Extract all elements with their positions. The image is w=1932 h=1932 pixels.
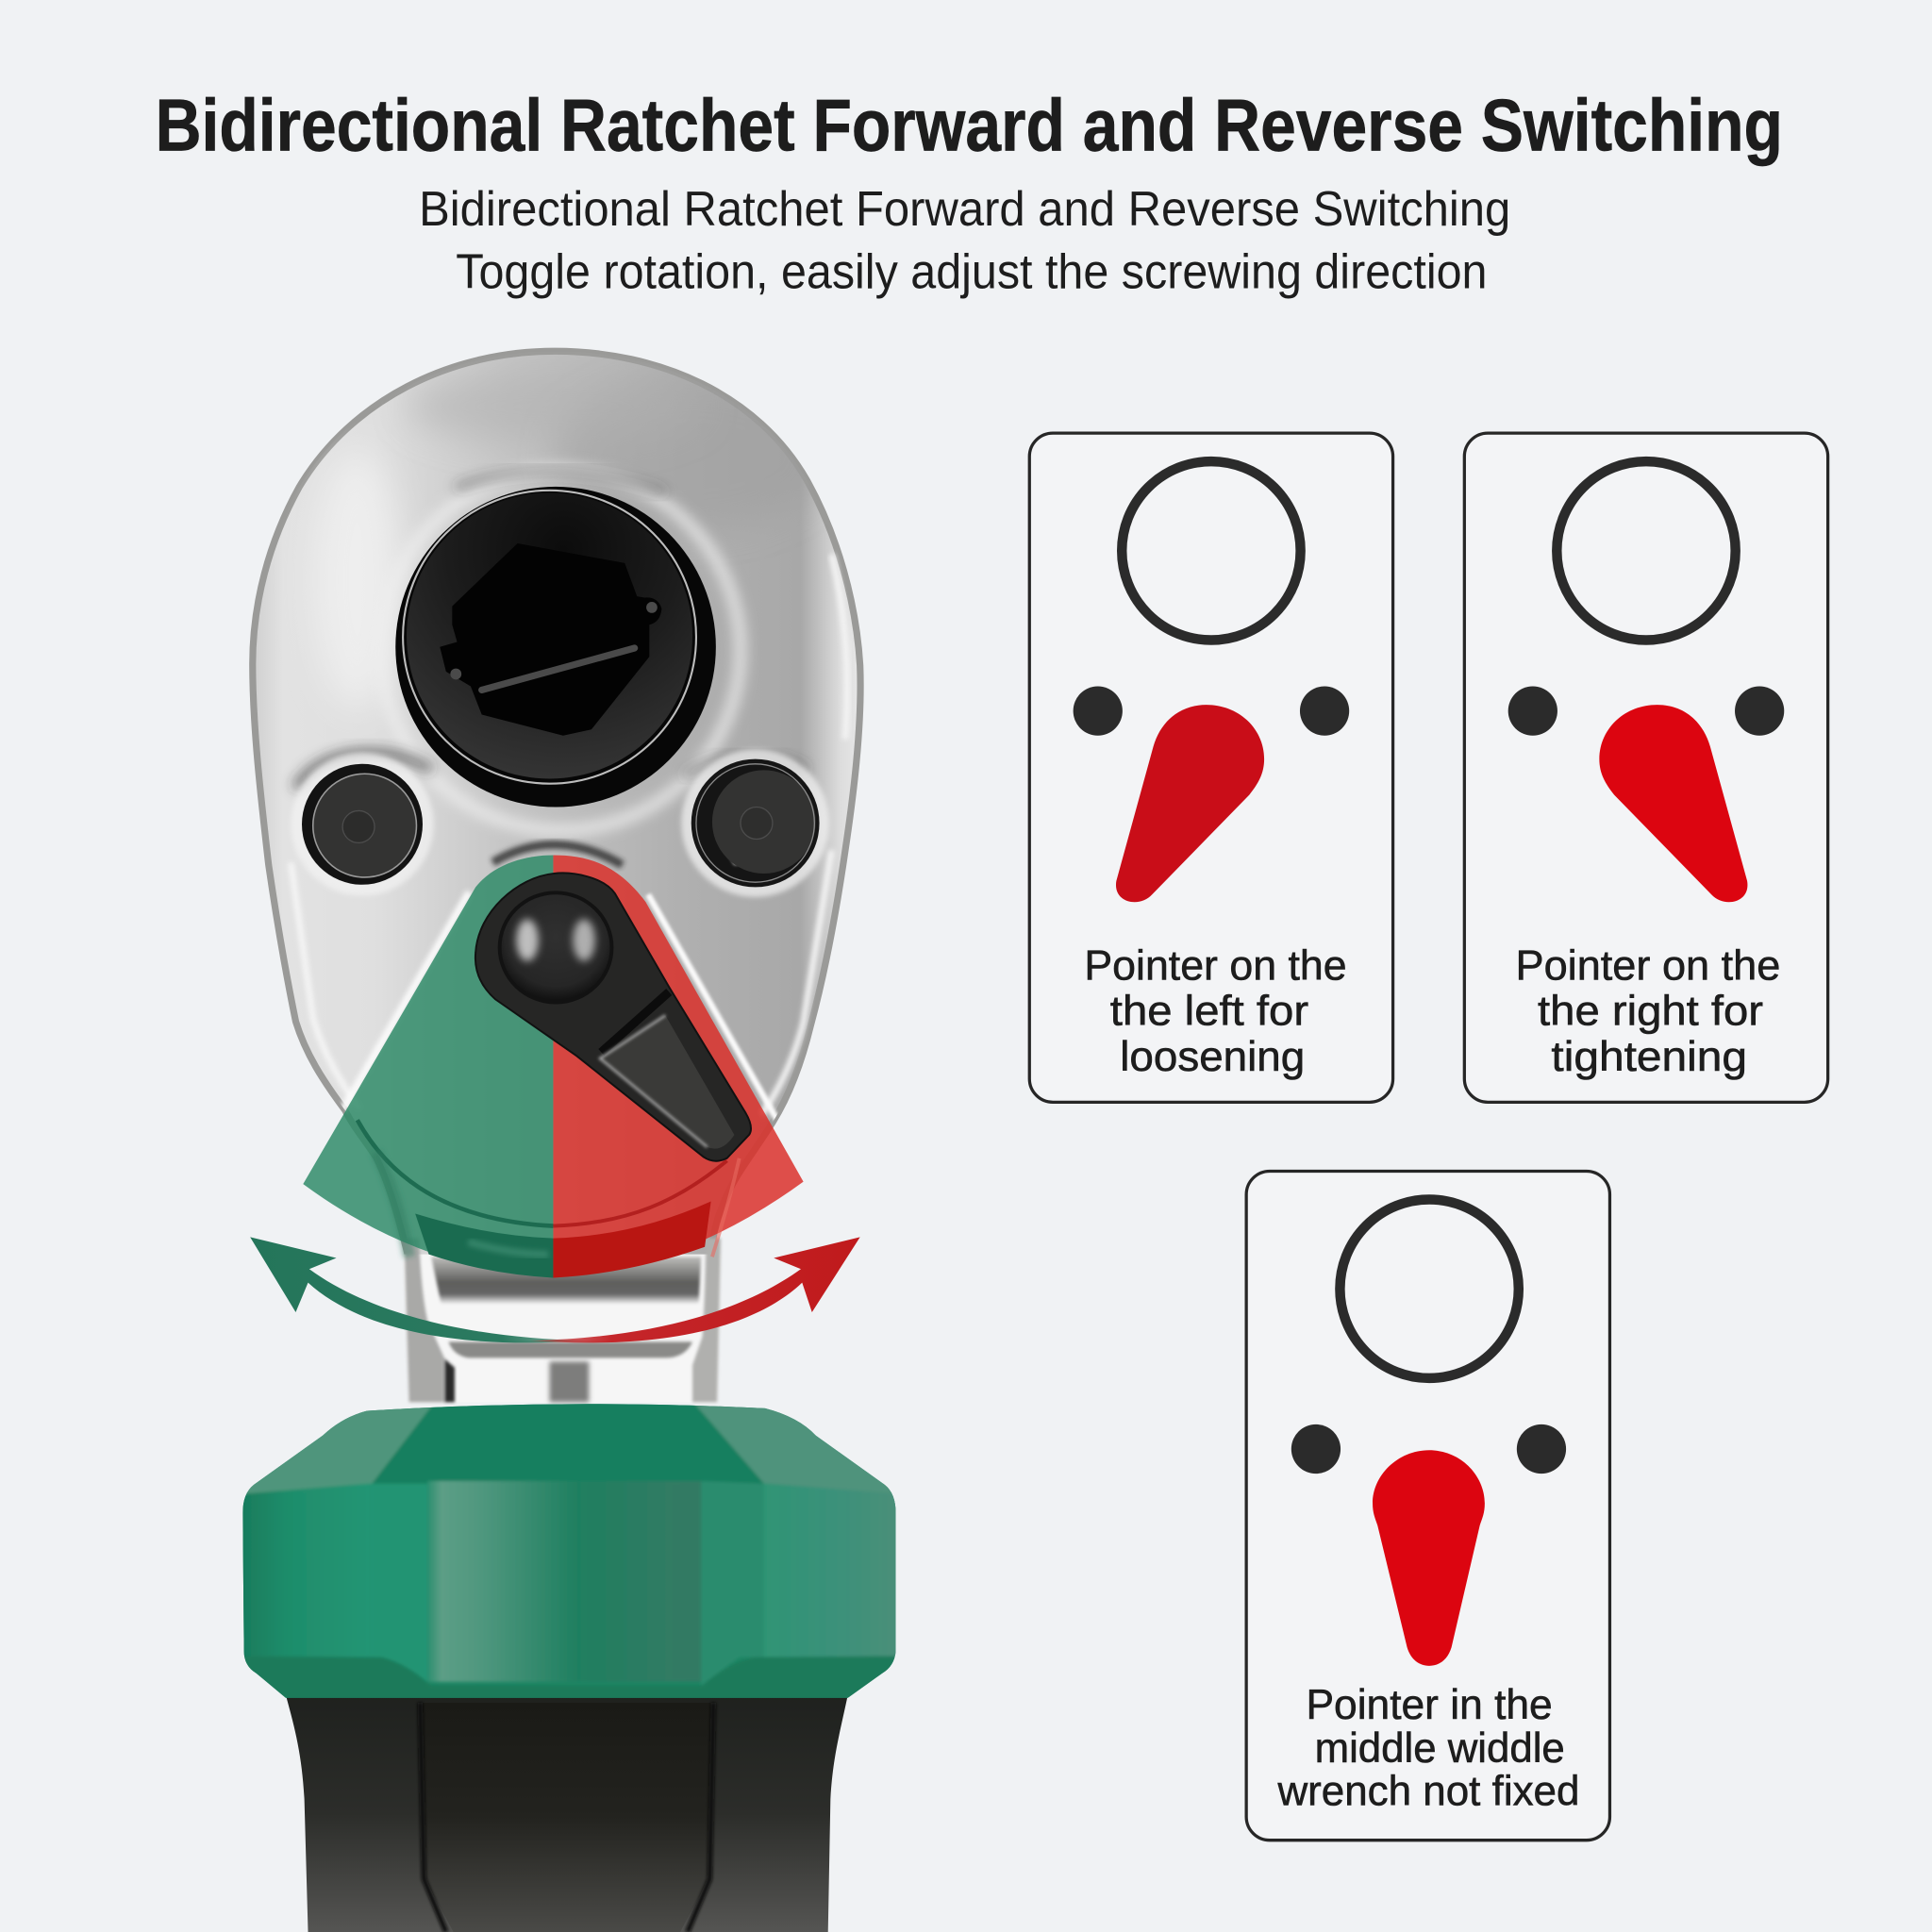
subtitle: Bidirectional Ratchet Forward and Reverse Switching xyxy=(419,182,1510,237)
subtitle xyxy=(419,182,1510,300)
icon: drive circle xyxy=(1340,1200,1519,1378)
square drive socket xyxy=(395,487,716,808)
right arrow: red xyxy=(530,1237,860,1342)
panel: pointer right for tightening xyxy=(1464,433,1828,1102)
caption: tightening xyxy=(1551,1034,1747,1080)
caption xyxy=(1516,942,1780,1080)
caption: Pointer on the xyxy=(1084,942,1347,989)
green sector: loosening xyxy=(303,855,553,1277)
direction lever xyxy=(475,873,751,1161)
panel: pointer left for loosening xyxy=(1029,433,1393,1102)
icon: right dot xyxy=(1300,687,1349,736)
icon: red pointer left xyxy=(1116,705,1264,902)
caption: the left for xyxy=(1110,989,1308,1035)
icon: red pointer right xyxy=(1599,705,1747,902)
caption: loosening xyxy=(1120,1034,1305,1080)
right screw xyxy=(681,749,829,897)
caption: Pointer in the xyxy=(1306,1682,1553,1728)
caption: the right for xyxy=(1538,989,1763,1035)
lever ball xyxy=(498,891,613,1004)
ratchet wrench illustration xyxy=(234,351,906,1932)
icon: drive circle xyxy=(1122,461,1301,641)
left screw xyxy=(291,753,434,896)
caption xyxy=(1084,942,1347,1080)
icon: drive circle xyxy=(1557,461,1736,641)
ratchet head xyxy=(253,351,860,1259)
panel: pointer in middle, not fixed xyxy=(1246,1171,1609,1840)
grip handle xyxy=(286,1695,848,1932)
icon: left dot xyxy=(1508,687,1557,736)
caption: wrench not fixed xyxy=(1276,1768,1579,1814)
wrench neck xyxy=(403,1239,721,1402)
icon: left dot xyxy=(1074,687,1123,736)
caption: middle widdle xyxy=(1315,1725,1565,1772)
icon: right dot xyxy=(1517,1424,1566,1474)
icon: left dot xyxy=(1291,1424,1341,1474)
left arrow: green xyxy=(250,1237,585,1342)
caption xyxy=(1276,1682,1579,1814)
caption: Pointer on the xyxy=(1516,942,1780,989)
icon: right dot xyxy=(1735,687,1784,736)
subtitle: Toggle rotation, easily adjust the screwing direction xyxy=(456,245,1487,300)
red sector: tightening xyxy=(553,855,804,1277)
green collar xyxy=(234,1398,906,1707)
icon: red pointer middle xyxy=(1373,1450,1485,1666)
